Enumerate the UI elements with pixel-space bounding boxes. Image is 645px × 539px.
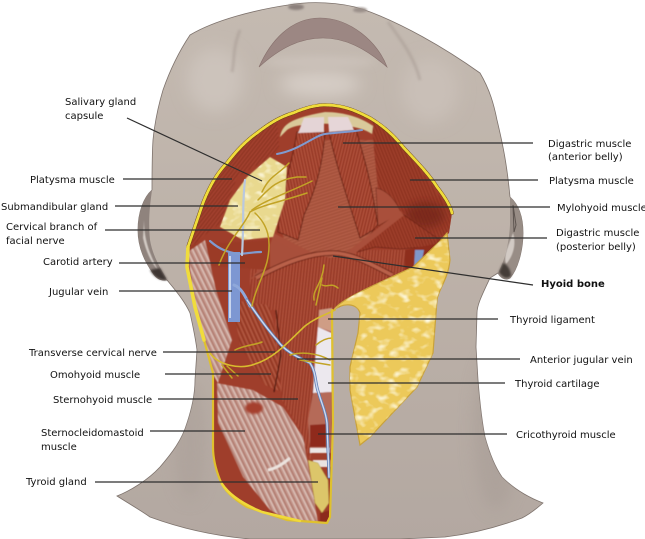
labels: left side: Platysma muscle bbox=[30, 175, 115, 186]
veins bbox=[210, 130, 362, 477]
right posterior digastric bbox=[358, 213, 440, 252]
white tendons bbox=[298, 117, 324, 133]
salivary gland bbox=[220, 156, 288, 241]
labels: right side: (posterior belly) bbox=[556, 242, 636, 253]
labels: right side: Platysma muscle bbox=[549, 176, 634, 187]
hyoid bone band bbox=[256, 253, 392, 278]
right vein bbox=[414, 250, 424, 268]
cricothyroid muscle bbox=[308, 392, 332, 448]
left ear bbox=[138, 190, 167, 280]
nerves bbox=[210, 163, 338, 378]
left platysma muscle bbox=[190, 120, 279, 248]
labels: right side: (anterior belly) bbox=[548, 152, 623, 163]
dissected area: muscle base bbox=[187, 105, 452, 523]
labels: right side: Thyroid cartilage bbox=[514, 379, 600, 390]
muscle groups bbox=[187, 112, 452, 522]
labels: left side: Jugular vein bbox=[48, 287, 108, 298]
fat flap bbox=[330, 230, 455, 448]
thyroid ligament bbox=[318, 308, 332, 332]
labels: left side: Sternocleidomastoid bbox=[41, 428, 144, 439]
tyroid gland bbox=[308, 460, 329, 513]
blurred muscle layer bbox=[187, 112, 452, 522]
right vessel patch bbox=[404, 244, 435, 270]
infrahyoid fibres bbox=[250, 250, 420, 310]
sternohyoid muscle bbox=[275, 310, 318, 458]
upper sternocleidomastoid bbox=[188, 240, 232, 383]
labels: left side: capsule bbox=[65, 111, 103, 122]
labels: left side: Cervical branch of bbox=[6, 222, 98, 233]
jugular vein bbox=[228, 252, 240, 322]
labels: right side: Hyoid bone bbox=[541, 279, 605, 290]
labels: right side: Digastric muscle bbox=[556, 228, 639, 239]
head and neck silhouette bbox=[117, 3, 543, 539]
left lower region bbox=[189, 244, 270, 270]
leader lines: right side bbox=[297, 143, 550, 434]
leader lines: left side bbox=[95, 118, 318, 482]
labels: right side: Thyroid ligament bbox=[509, 315, 595, 326]
labels: left side: Submandibular gland bbox=[1, 202, 108, 213]
labels: left side: Sternohyoid muscle bbox=[53, 395, 152, 406]
labels: left side: facial nerve bbox=[6, 236, 65, 247]
sternocleidomastoid muscle bbox=[217, 383, 318, 522]
labels: right side: Digastric muscle bbox=[548, 139, 631, 150]
yellow fascia margin bbox=[187, 105, 452, 523]
right platysma shadow bbox=[405, 202, 445, 228]
labels: left side: muscle bbox=[41, 442, 77, 453]
left tendon to hyoid bbox=[252, 239, 300, 279]
labels: left side: Omohyoid muscle bbox=[50, 370, 140, 381]
right digastric anterior belly bbox=[329, 130, 378, 238]
labels: right side: Cricothyroid muscle bbox=[516, 430, 616, 441]
labels: left side: Tyroid gland bbox=[25, 477, 87, 488]
lower lip bbox=[259, 18, 387, 67]
left digastric anterior belly bbox=[278, 132, 325, 240]
nostrils bbox=[288, 4, 367, 12]
labels: right side: Mylohyoid muscle bbox=[557, 203, 645, 214]
mylohyoid muscle bbox=[282, 139, 378, 258]
digastric tendons meeting at hyoid bbox=[273, 213, 402, 255]
cartilage rings bbox=[310, 448, 330, 467]
omohyoid muscle bbox=[236, 301, 280, 390]
labels: left side: Transverse cervical nerve bbox=[28, 348, 157, 359]
labels: left side: Carotid artery bbox=[43, 257, 113, 268]
submental vein bbox=[277, 130, 362, 154]
labels: left side: Salivary gland bbox=[65, 97, 136, 108]
mandible cream strip bbox=[280, 112, 373, 137]
anterior jugular vein bbox=[247, 300, 329, 477]
right ear bbox=[498, 197, 523, 279]
right platysma muscle bbox=[372, 118, 452, 238]
vein branches bbox=[210, 241, 261, 254]
labels: left side bbox=[1, 97, 157, 488]
labels: right side: Anterior jugular vein bbox=[530, 355, 633, 366]
thyroid cartilage bbox=[313, 327, 332, 393]
labels: right side bbox=[509, 139, 645, 441]
